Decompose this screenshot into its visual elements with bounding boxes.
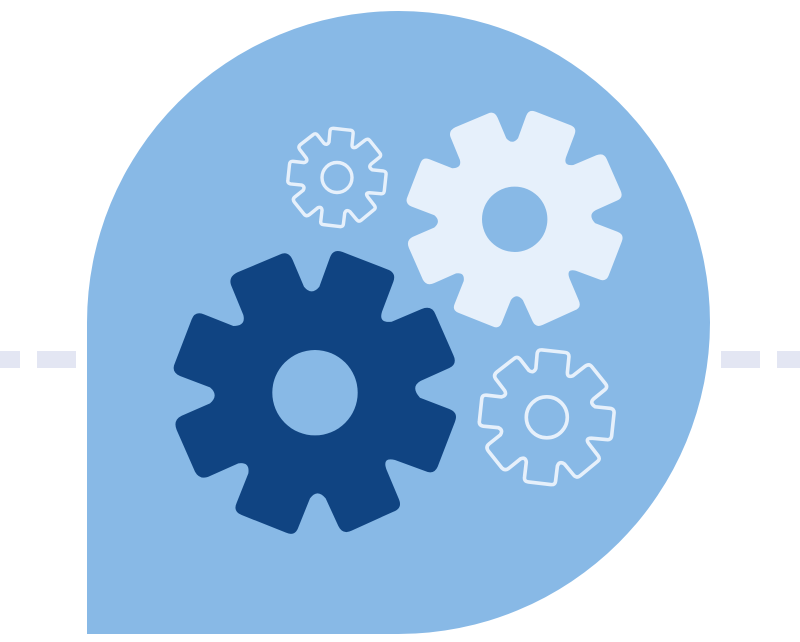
dashed line: right [721,351,800,368]
icon: small outlined gear [277,118,396,237]
icon: light solid gear [407,111,623,327]
teardrop background panel [87,11,710,634]
icon: medium outlined gear [465,336,628,499]
icon: large dark blue gear [174,251,456,534]
dashed line: left [0,351,76,368]
